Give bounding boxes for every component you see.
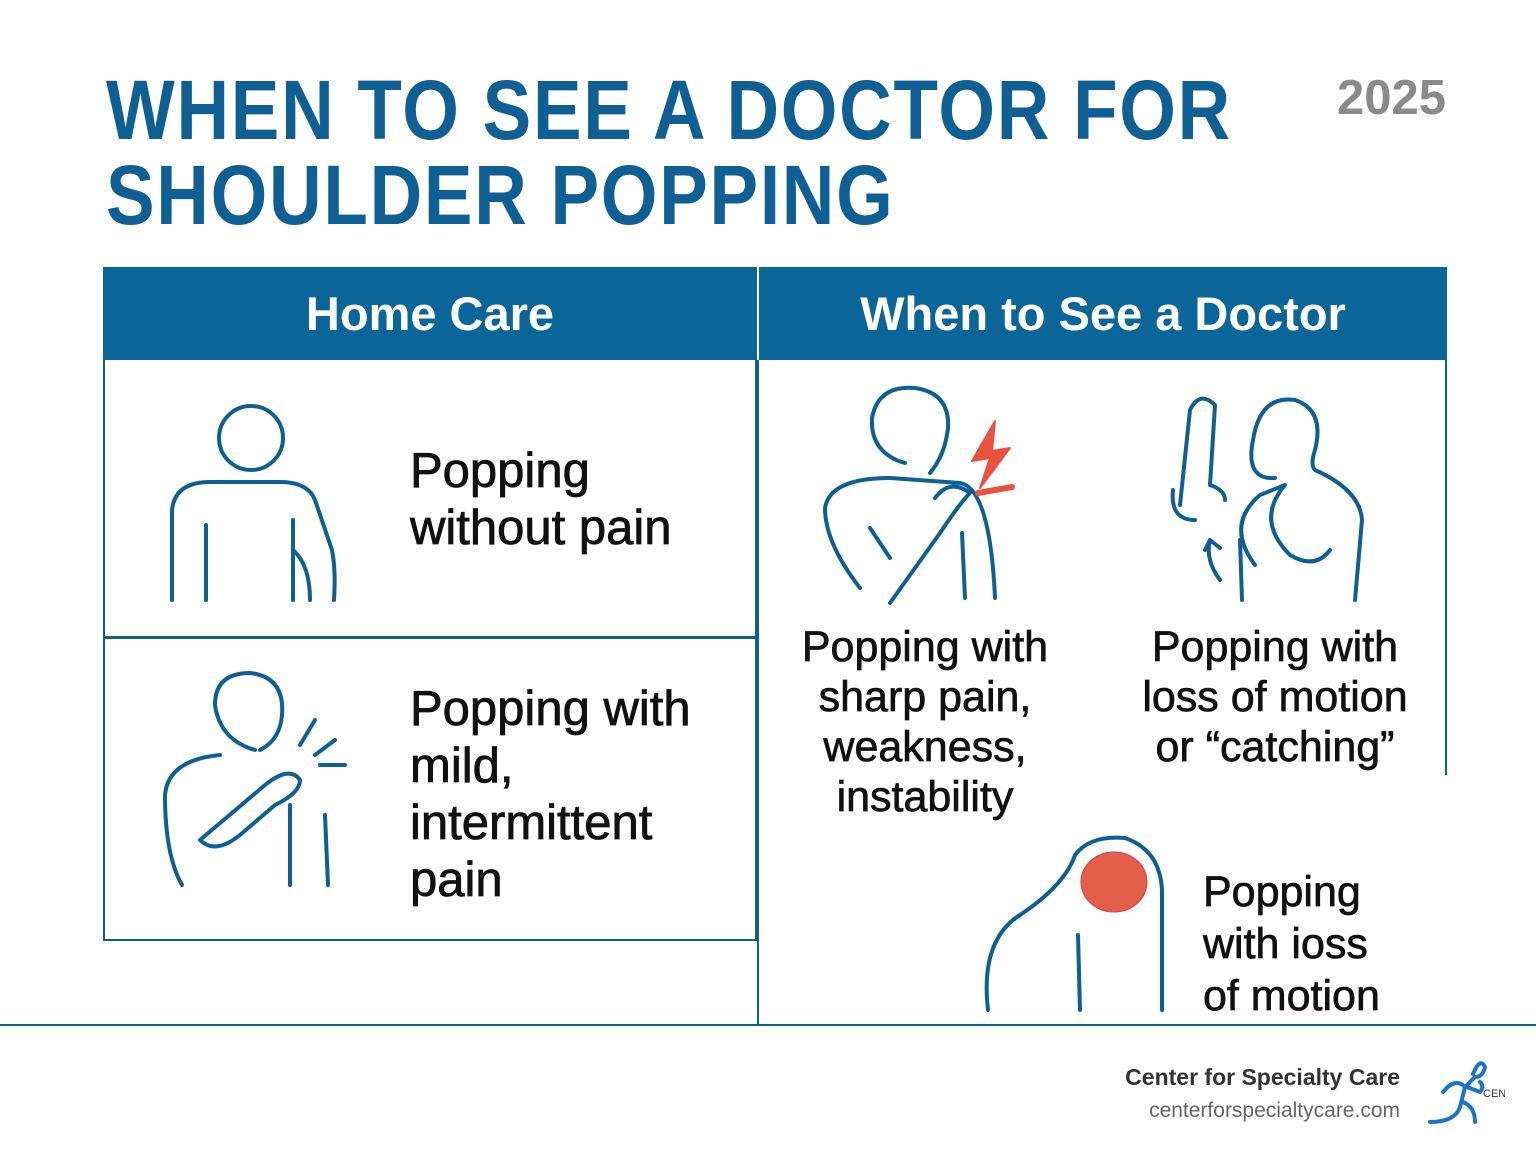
text: popping without pain: Popping xyxy=(410,444,590,498)
text: loss of motion: Popping xyxy=(1203,868,1361,916)
title: WHEN TO SEE A DOCTOR FOR xyxy=(106,63,1232,157)
year: 2025 xyxy=(1337,71,1446,125)
logo xyxy=(1428,1061,1505,1124)
footer brand: Center for Specialty Care xyxy=(1125,1064,1400,1090)
text: sharp pain: weakness, xyxy=(823,723,1027,771)
text: loss of motion: of motion xyxy=(1203,972,1380,1020)
text: loss of motion xyxy=(1202,868,1380,1020)
text: loss of motion or catching: Popping with xyxy=(1152,623,1398,671)
text: loss of motion: with ioss xyxy=(1203,920,1368,968)
icon: sharp pain xyxy=(823,386,1015,606)
text: mild pain: mild, xyxy=(410,739,513,793)
icon: person no pain xyxy=(170,404,337,602)
text: popping without pain xyxy=(409,444,672,555)
table borders xyxy=(103,360,757,941)
header: when to see a doctor xyxy=(759,267,1447,360)
text: sharp pain: sharp pain, xyxy=(819,673,1031,721)
header: when to see a doctor: When to See a Doctor xyxy=(860,287,1346,340)
text: loss of motion or catching: or “catching” xyxy=(1156,723,1394,771)
text: sharp pain: Popping with xyxy=(802,623,1048,671)
header: home care xyxy=(103,267,757,360)
icon: mild pain xyxy=(163,671,347,888)
footer brand xyxy=(1125,1064,1400,1122)
text: sharp pain xyxy=(802,623,1048,821)
text: mild pain xyxy=(410,682,691,907)
icon: loss of motion xyxy=(1170,396,1364,602)
text: sharp pain: instability xyxy=(837,773,1013,821)
text: popping without pain: without pain xyxy=(410,501,672,555)
text: mild pain: intermittent xyxy=(410,796,652,850)
text: mild pain: Popping with xyxy=(410,682,691,736)
text: loss of motion or catching: loss of motion xyxy=(1142,673,1408,721)
title xyxy=(106,63,1232,242)
footer brand: centerforspecialtycare.com xyxy=(1149,1099,1400,1122)
title: SHOULDER POPPING xyxy=(106,148,894,242)
icon: shoulder joint xyxy=(984,836,1164,1012)
header: home care: Home Care xyxy=(306,287,554,340)
text: mild pain: pain xyxy=(410,853,503,907)
text: loss of motion or catching xyxy=(1142,623,1408,771)
